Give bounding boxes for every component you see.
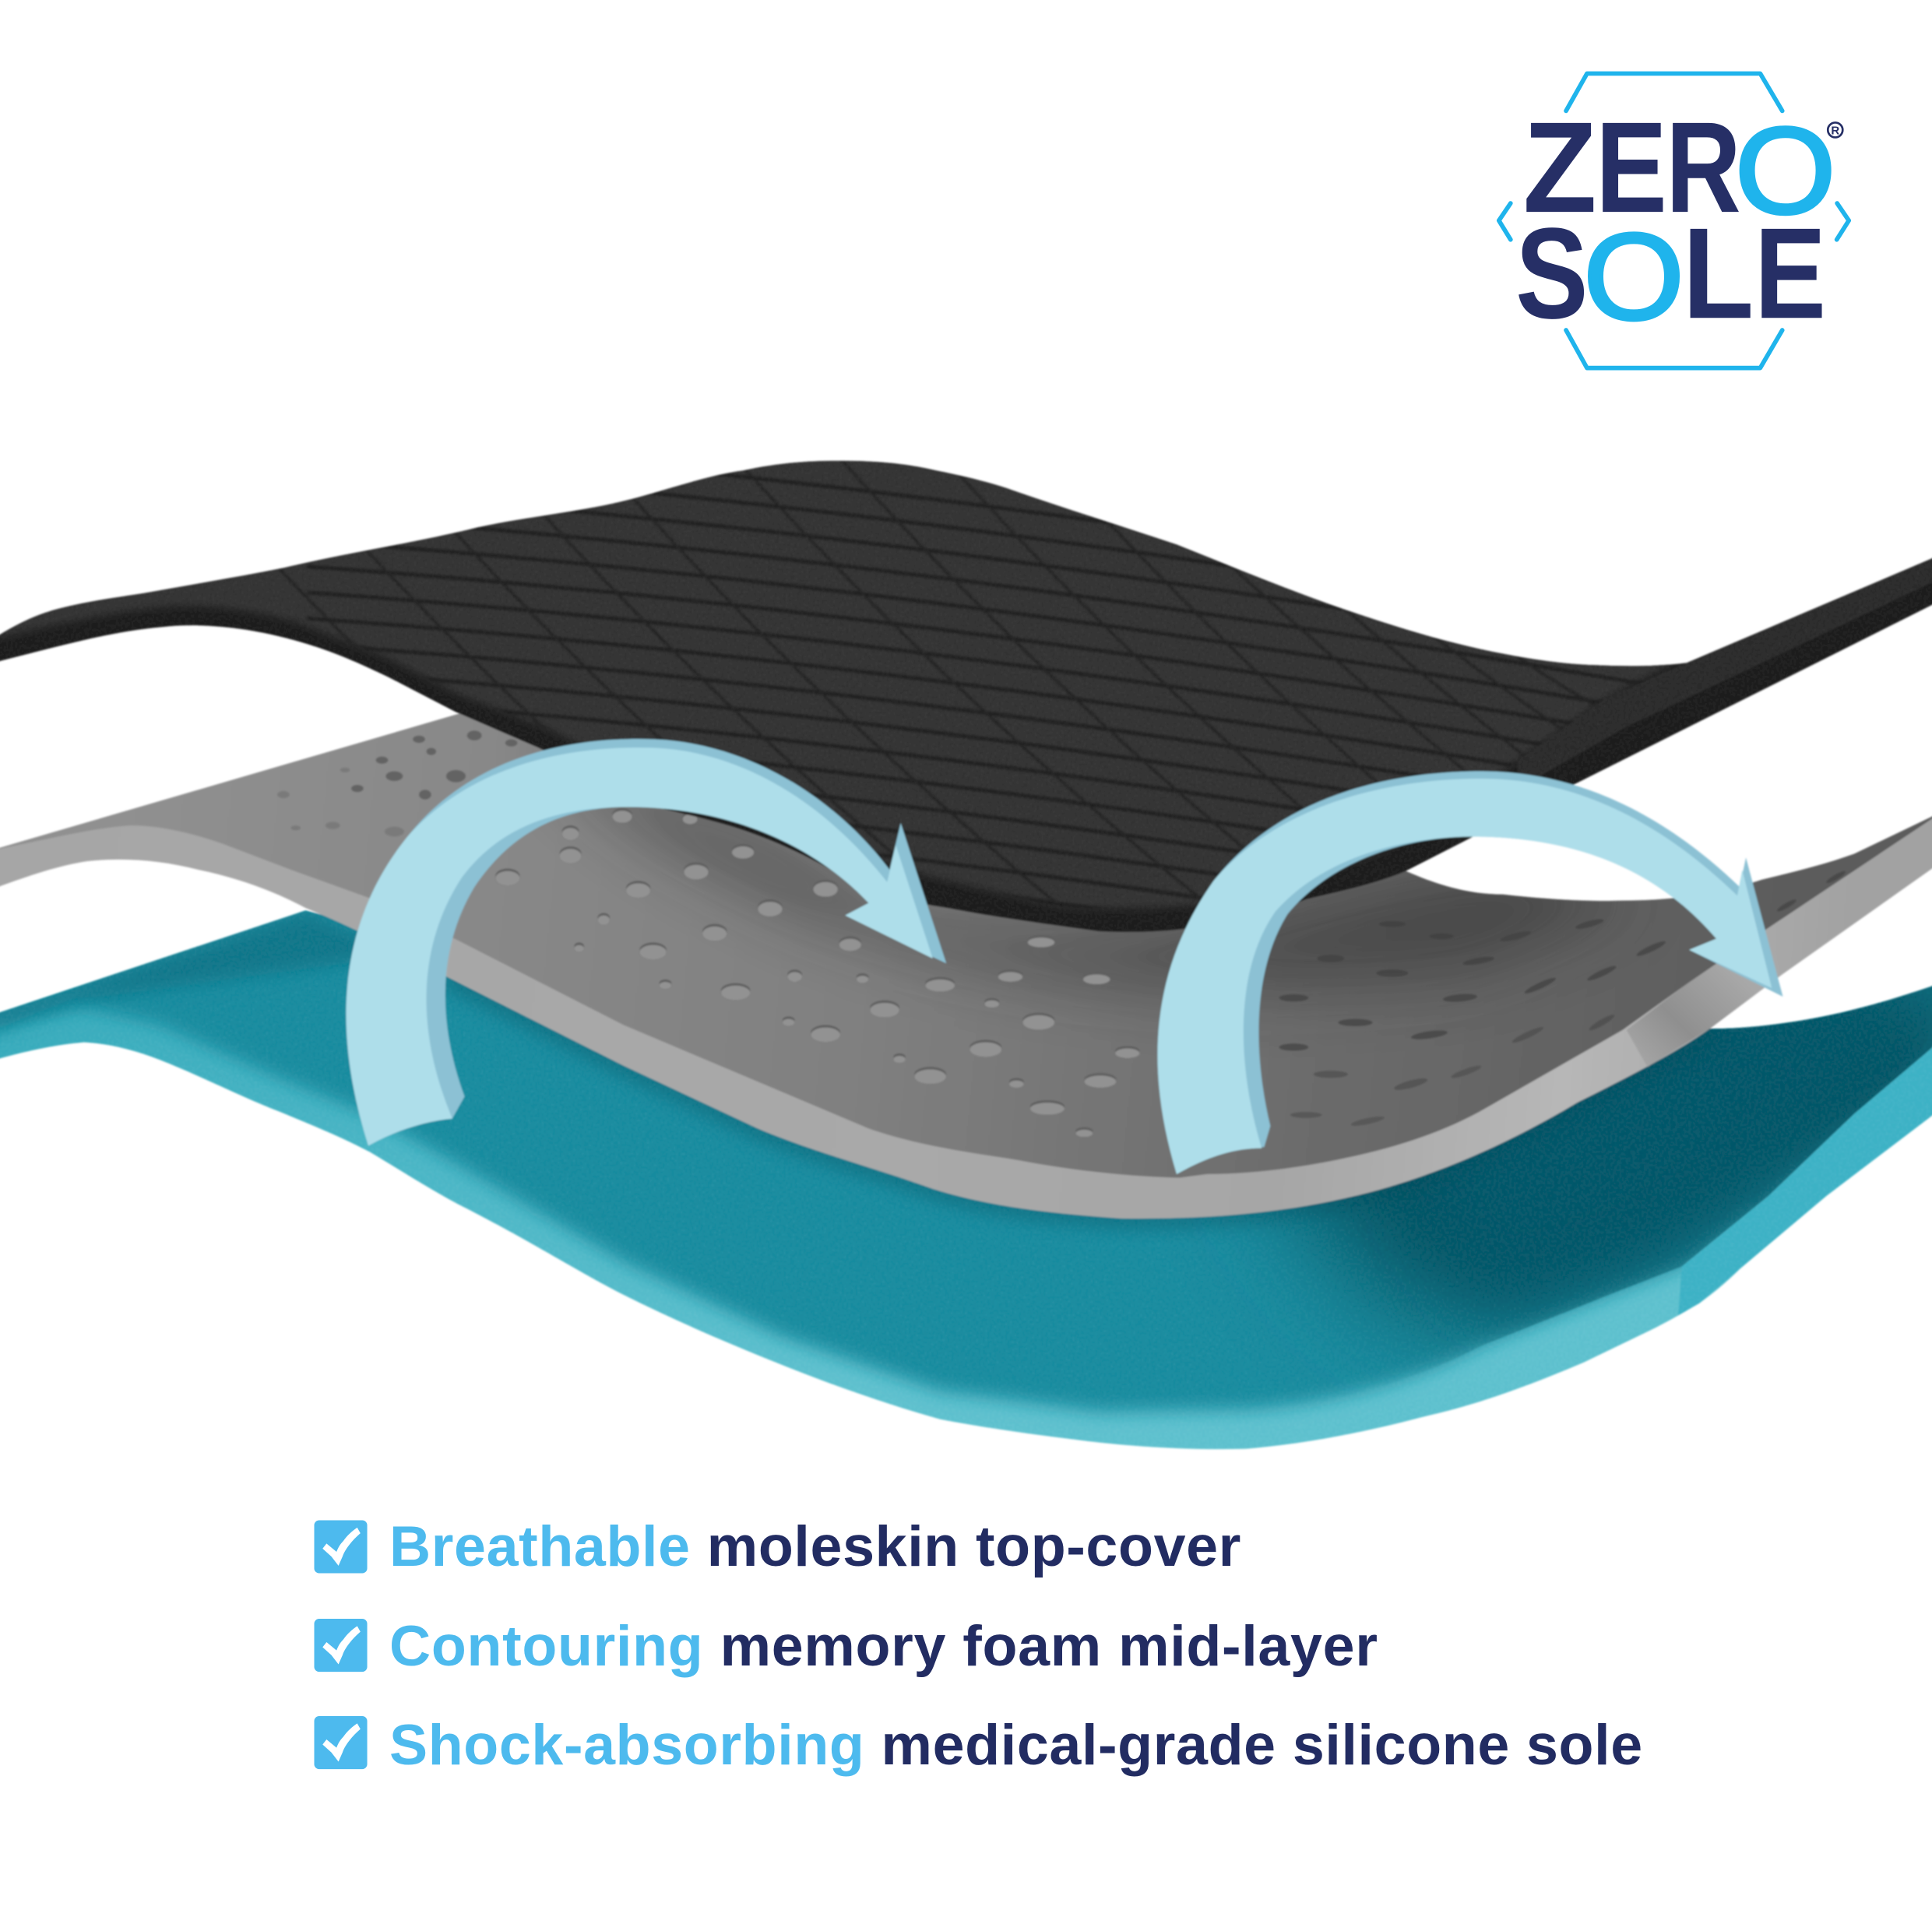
checklist item: contouring bbox=[314, 1613, 1378, 1678]
texture bbox=[0, 444, 1932, 948]
icon: checkbox bbox=[314, 1716, 368, 1769]
logo word ZERO: Z bbox=[1523, 96, 1597, 240]
dots: right flat bumps bbox=[1279, 870, 1846, 1127]
logo word ZERO: O bbox=[1735, 102, 1836, 240]
logo word SOLE: L bbox=[1683, 202, 1754, 346]
registered mark bbox=[1828, 122, 1842, 137]
dots: round bumps bbox=[495, 811, 1140, 1137]
right end band bbox=[1678, 1037, 1932, 1316]
registered mark: R bbox=[1831, 124, 1839, 137]
shadow under black layer bbox=[577, 807, 1614, 1015]
arrow: right airflow arrow bbox=[1158, 771, 1783, 1174]
icon: checkbox bbox=[314, 1619, 368, 1672]
logo: Zero Sole bbox=[1499, 73, 1849, 368]
layer: black moleskin top-cover bbox=[0, 459, 1932, 933]
right end strip highlight bbox=[1518, 553, 1932, 789]
arrow: left airflow arrow bbox=[347, 739, 946, 1145]
logo word SOLE: O bbox=[1583, 208, 1684, 346]
logo word ZERO: R bbox=[1666, 96, 1741, 240]
top rim of teal layer bbox=[0, 910, 406, 1032]
icon: checkbox bbox=[314, 1520, 368, 1574]
layer: grey memory foam bbox=[0, 690, 1932, 1219]
text line: Contouring memory foam mid-layer bbox=[389, 1613, 1378, 1678]
texture bbox=[0, 899, 1932, 1466]
logo word SOLE: S bbox=[1515, 202, 1589, 346]
band facet at right bbox=[1627, 929, 1780, 1067]
logo word SOLE: E bbox=[1754, 202, 1826, 346]
dots: upper-left perforations bbox=[277, 730, 518, 836]
shadow below grey layer bbox=[445, 976, 1712, 1219]
layer: teal silicone sole bbox=[0, 899, 1932, 1466]
checklist item: shock-absorbing bbox=[314, 1712, 1642, 1777]
logo word ZERO: E bbox=[1596, 96, 1667, 240]
text line: Breathable moleskin top-cover bbox=[389, 1514, 1240, 1578]
text line: Shock-absorbing medical-grade silicone sole bbox=[389, 1712, 1642, 1777]
illustration: insole layers and airflow arrows bbox=[0, 438, 1932, 1466]
diamond quilting pattern bbox=[209, 438, 1663, 1024]
checklist item: breathable bbox=[314, 1514, 1240, 1578]
logo hexagon frame bbox=[1499, 73, 1849, 368]
darker right portion of teal surface bbox=[1257, 961, 1932, 1324]
